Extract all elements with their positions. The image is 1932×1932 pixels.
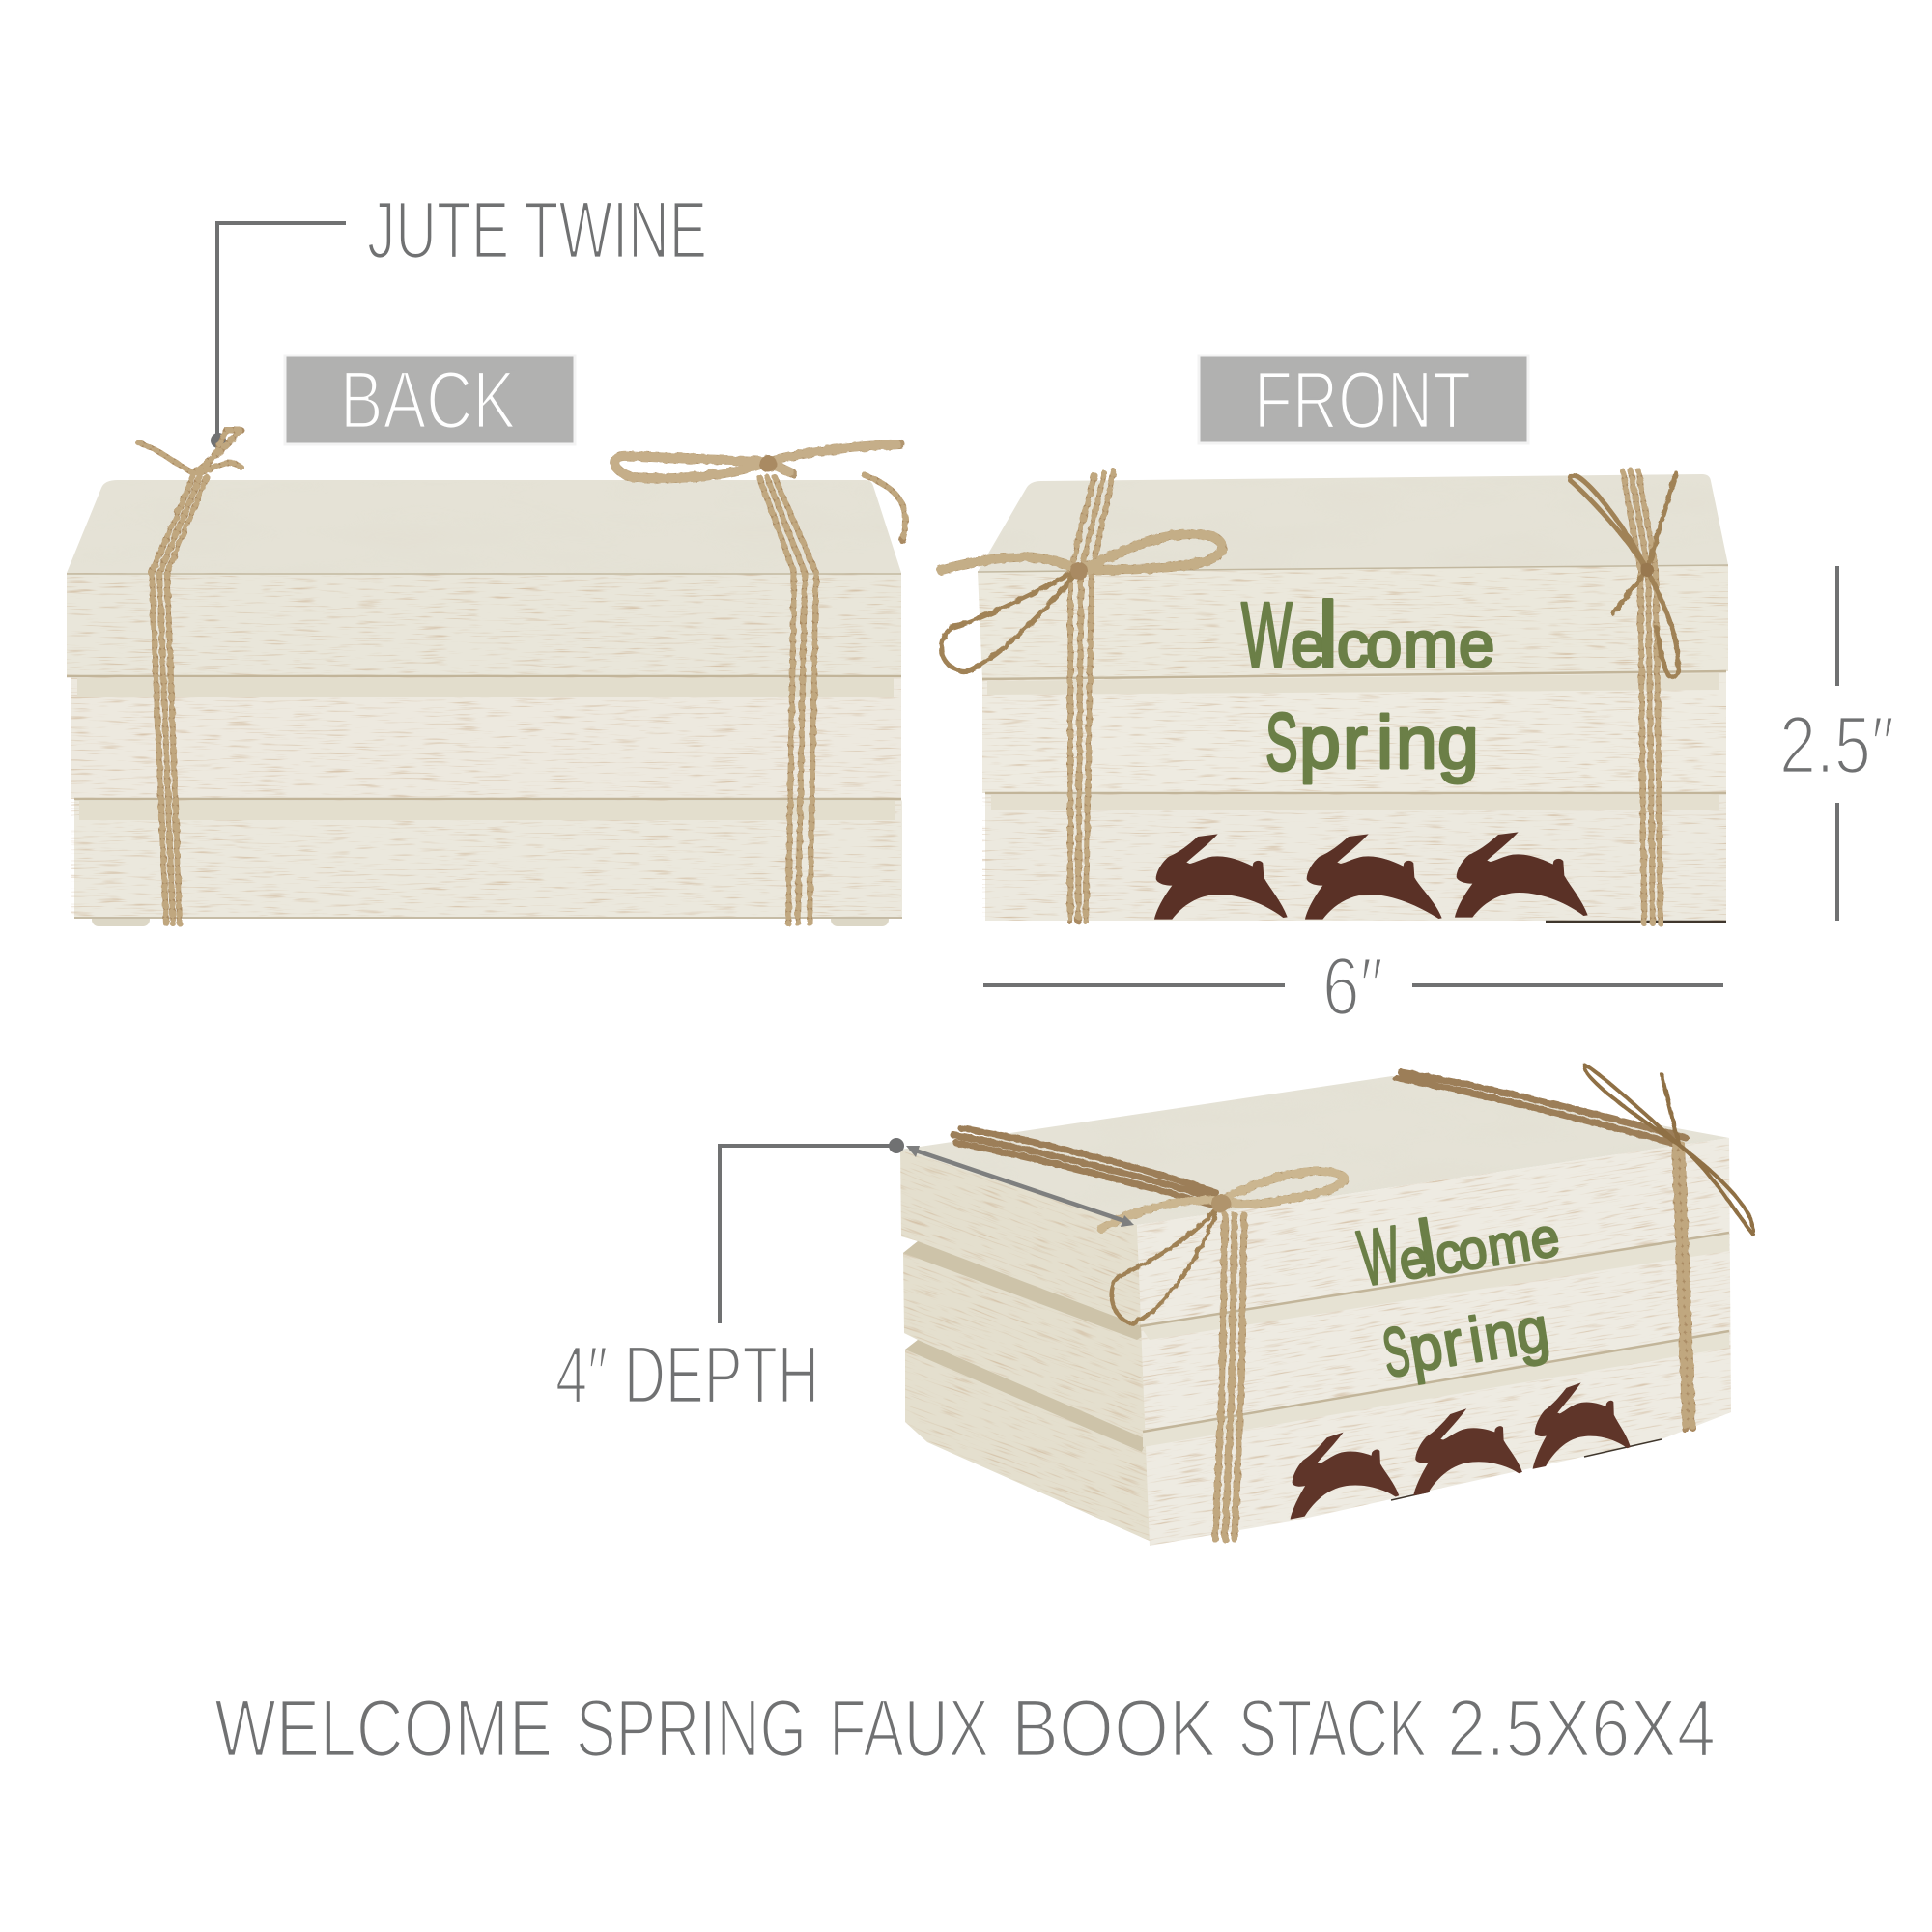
bunny 2 — [1305, 834, 1442, 920]
title: STACK — [1238, 1683, 1427, 1774]
callout: 4 inch depth: 4″ DEPTH — [555, 1329, 819, 1420]
text: spring: g — [1437, 701, 1479, 784]
bunny 2 — [1413, 1398, 1523, 1495]
text: welcome: e — [1395, 1226, 1433, 1292]
bunny 3 — [1455, 832, 1588, 918]
text: spring: p — [1299, 701, 1341, 784]
text: welcome: c — [1337, 609, 1370, 681]
text: spring — [1265, 696, 1479, 787]
text: welcome: e — [1525, 1205, 1564, 1270]
title: WELCOME — [214, 1683, 553, 1774]
text: welcome — [1241, 582, 1494, 687]
label: back: BACK — [340, 355, 516, 445]
text: welcome: e — [1459, 609, 1494, 681]
text: spring: S — [1378, 1313, 1415, 1393]
text: welcome — [1352, 1184, 1564, 1302]
text: spring: i — [1463, 1304, 1488, 1376]
title: FAUX — [829, 1683, 989, 1774]
product photo: front view of book stack — [941, 470, 1728, 923]
callout: jute twine — [211, 185, 707, 448]
title — [214, 1683, 1716, 1774]
text: spring: g — [1511, 1293, 1553, 1369]
text: spring: r — [1343, 701, 1368, 784]
dimension: height 2.5 inches: 2.5″ — [1779, 699, 1894, 790]
product photo: back view of book stack — [67, 430, 906, 926]
text: welcome: e — [1291, 609, 1326, 681]
label: front: FRONT — [1254, 355, 1471, 445]
text: welcome: o — [1366, 609, 1402, 681]
bunny 1 — [1154, 834, 1288, 920]
callout: jute twine: JUTE TWINE — [367, 185, 707, 275]
title: 2.5X6X4 — [1447, 1683, 1716, 1774]
bunny 1 — [1291, 1421, 1400, 1520]
text: welcome: m — [1483, 1209, 1535, 1278]
callout: 4 inch depth — [555, 1138, 1134, 1420]
text: welcome: l — [1412, 1204, 1442, 1293]
text: spring: n — [1396, 701, 1437, 784]
text: spring: n — [1479, 1299, 1521, 1374]
text: spring: p — [1405, 1311, 1447, 1385]
bunny 3 — [1533, 1373, 1633, 1469]
text: spring: i — [1377, 701, 1393, 784]
text: welcome: W — [1241, 582, 1293, 687]
text: welcome: c — [1431, 1220, 1465, 1286]
text: spring: S — [1265, 696, 1298, 787]
dimension: width 6 inches: 6″ — [1322, 941, 1383, 1032]
text: spring: r — [1438, 1307, 1468, 1380]
title: BOOK — [1011, 1683, 1216, 1774]
text: welcome: m — [1404, 609, 1458, 681]
text: spring — [1378, 1291, 1554, 1393]
title: SPRING — [576, 1683, 807, 1774]
text: welcome: o — [1454, 1216, 1492, 1282]
text: welcome: W — [1353, 1209, 1406, 1302]
product photo: angled view of book stack — [900, 1063, 1755, 1546]
text: welcome: l — [1318, 583, 1338, 687]
